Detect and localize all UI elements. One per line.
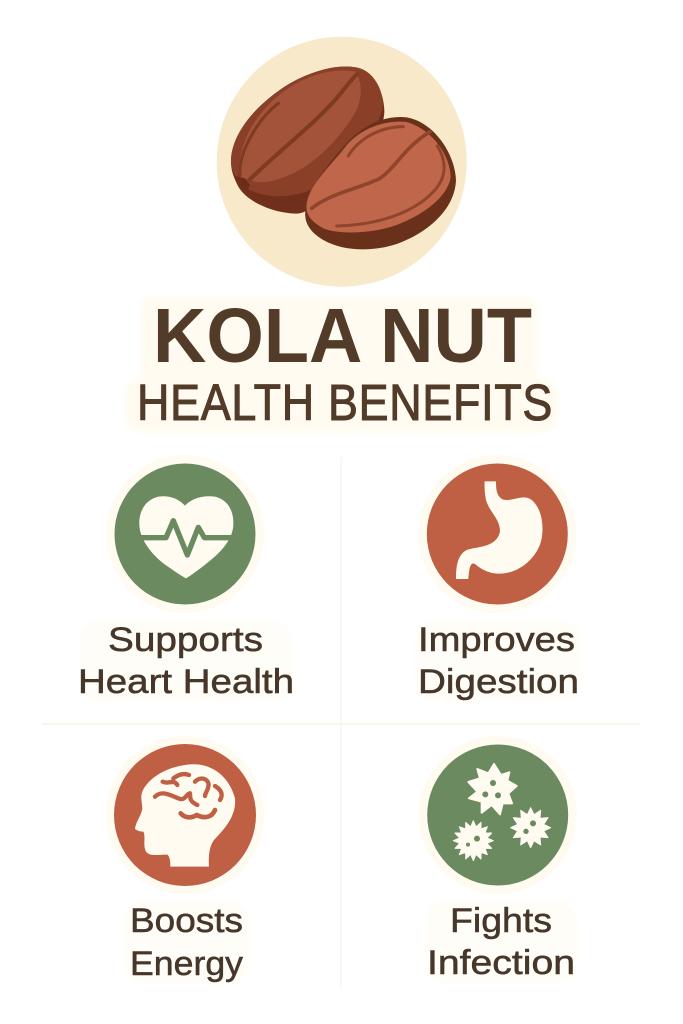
icon: back kola nut [231, 66, 384, 214]
label: supports heart health: Heart Health [78, 663, 294, 701]
label: improves digestion: Improves [418, 621, 575, 659]
icon: right germ [511, 808, 551, 848]
heading: Kola Nut: KOLA NUT [153, 293, 532, 379]
panel: digestion [415, 455, 581, 702]
icon: head with brain [106, 736, 264, 894]
label: boosts energy: Boosts [130, 902, 243, 940]
panel: energy [106, 736, 264, 984]
label: supports heart health: Supports [108, 621, 263, 659]
icon: lower left germ [453, 821, 493, 861]
icon: large germ [468, 764, 517, 814]
icon: front kola nut [305, 117, 456, 249]
title [125, 293, 558, 432]
label: fights infection: Fights [450, 902, 552, 940]
icon: heart with pulse [106, 455, 264, 613]
panel: heart health [78, 455, 294, 702]
label: boosts energy: Energy [130, 945, 243, 983]
icon: stomach [418, 455, 576, 613]
label: fights infection: Infection [427, 944, 575, 982]
label: improves digestion: Digestion [418, 663, 579, 701]
icon: kola nuts on cream circle [217, 37, 467, 287]
panel: infection [419, 736, 577, 984]
icon: germs [419, 736, 577, 894]
heading: Health Benefits: HEALTH BENEFITS [137, 375, 552, 432]
